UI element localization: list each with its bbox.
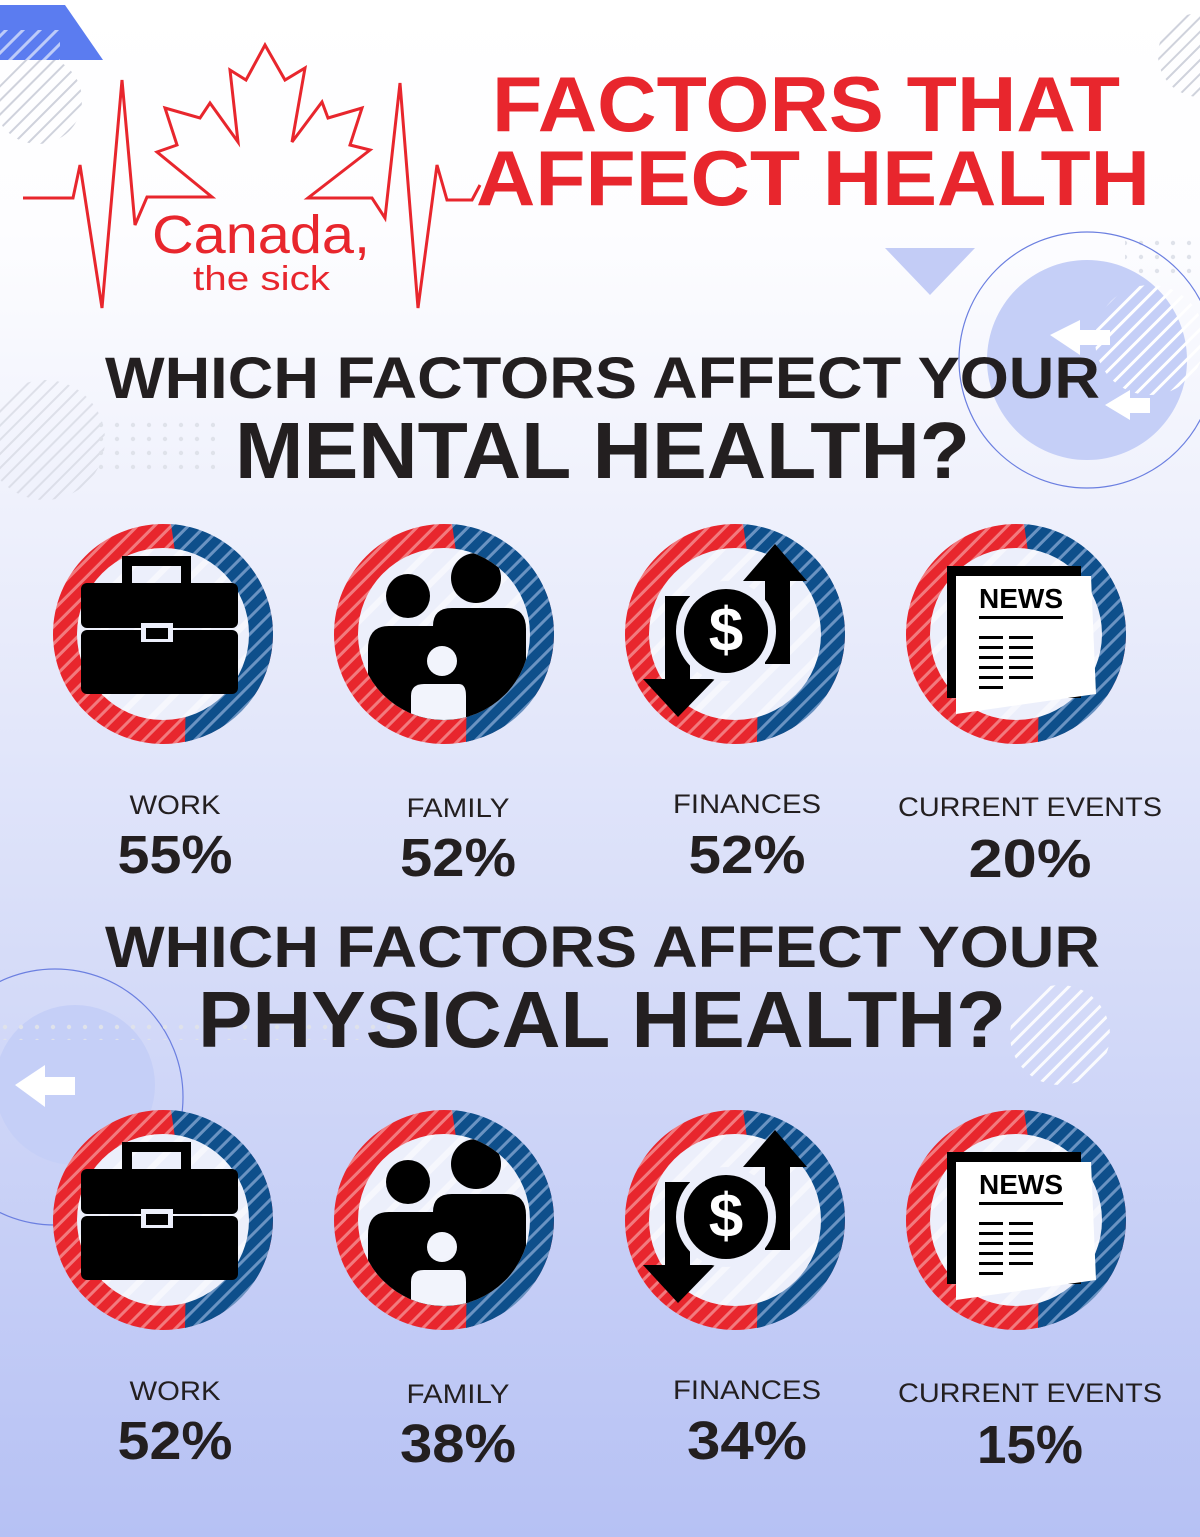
row 2: physical health icons [53, 1110, 1126, 1330]
row 1 labels and percentages: CURRENT EVENTS [898, 792, 1162, 822]
heading: mental health: MENTAL HEALTH? [235, 406, 970, 495]
icon: finances 2 [625, 1110, 845, 1330]
row 2 labels and percentages: 15% [977, 1415, 1083, 1475]
icon: family 2 [334, 1110, 554, 1330]
row 2 labels and percentages: FINANCES [673, 1375, 821, 1405]
heading: physical health: PHYSICAL HEALTH? [198, 975, 1006, 1064]
icon: news [906, 524, 1126, 744]
row 2 labels and percentages: WORK [130, 1376, 220, 1406]
logo: Canada, the sick: Canada, [152, 205, 370, 265]
row 2 labels and percentages: CURRENT EVENTS [898, 1378, 1162, 1408]
row 1 labels and percentages [118, 789, 1162, 889]
row 1 labels and percentages: 55% [118, 825, 232, 885]
title: AFFECT HEALTH [476, 134, 1150, 222]
row 1: mental health icons [53, 524, 1126, 744]
decoration: top-right striped circle [1158, 13, 1200, 97]
row 2 labels and percentages: 52% [118, 1411, 232, 1471]
heading: physical health: WHICH FACTORS AFFECT YOUR [105, 915, 1100, 980]
title: FACTORS THAT [492, 60, 1120, 148]
icon: work briefcase 2 [53, 1110, 273, 1330]
icon: finances 2: $ [709, 1182, 743, 1251]
decoration: right striped circle mid [1010, 985, 1110, 1085]
icon: news: NEWS [979, 583, 1063, 614]
heading: physical health [105, 915, 1100, 1064]
heading: mental health: WHICH FACTORS AFFECT YOUR [105, 346, 1100, 411]
icon: news 2 [906, 1110, 1126, 1330]
row 1 labels and percentages: 52% [688, 825, 806, 885]
icon: finances: $ [709, 596, 743, 665]
icon: work briefcase [53, 524, 273, 744]
decoration: left dots [0, 380, 215, 500]
icon: finances [625, 524, 845, 744]
decoration: bottom-left circle with arrows [0, 969, 390, 1225]
title [476, 60, 1150, 222]
row 1 labels and percentages: 20% [968, 829, 1092, 889]
logo: Canada, the sick [23, 45, 480, 308]
row 2 labels and percentages: 34% [687, 1411, 807, 1471]
row 2 labels and percentages: 38% [400, 1414, 516, 1474]
row 1 labels and percentages: FAMILY [406, 793, 510, 823]
row 1 labels and percentages: 52% [400, 828, 516, 888]
decoration: right circle with arrows [885, 232, 1200, 488]
row 1 labels and percentages: WORK [130, 790, 220, 820]
row 2 labels and percentages: FAMILY [406, 1379, 510, 1409]
row 1 labels and percentages: FINANCES [673, 789, 821, 819]
row 2 labels and percentages [118, 1375, 1162, 1475]
heading: mental health [105, 346, 1100, 495]
decoration: top-left shapes [0, 5, 103, 144]
icon: family [334, 524, 554, 744]
icon: news 2: NEWS [979, 1169, 1063, 1200]
logo: Canada, the sick: the sick [193, 260, 331, 298]
